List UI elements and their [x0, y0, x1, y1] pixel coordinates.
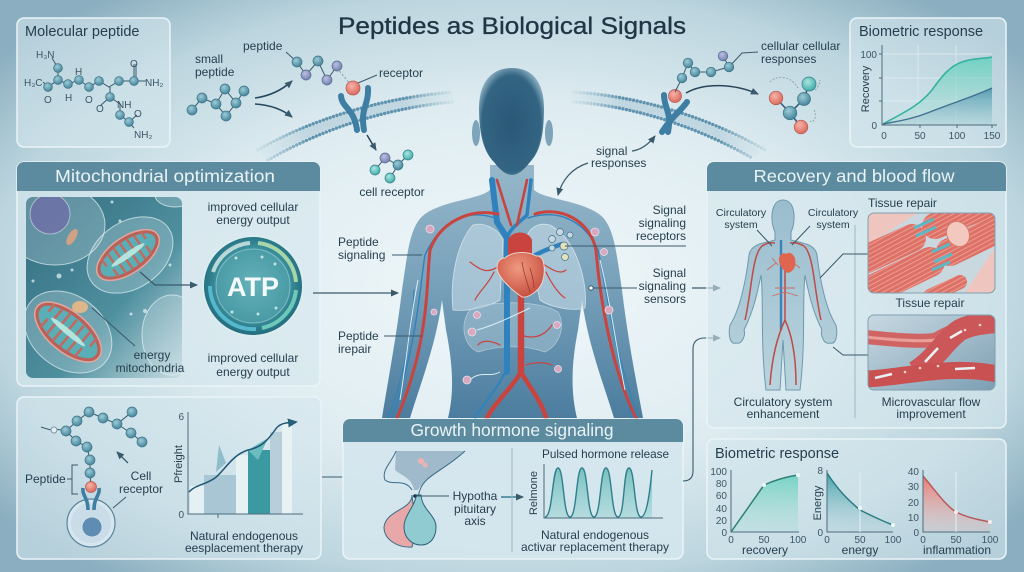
cell membrane: right — [573, 92, 765, 158]
molecule diagram: H₃N — [36, 50, 55, 61]
chart: recovery: 60 — [716, 491, 727, 502]
heading: molecular peptide: Molecular peptide — [25, 24, 139, 40]
arteries: red — [397, 180, 636, 418]
body silhouette — [382, 165, 643, 418]
chart: inflammation: 20 — [908, 498, 919, 509]
nerves — [400, 260, 625, 400]
panel: growth hormone signaling — [343, 419, 683, 559]
line chart: recovery: Recovery — [860, 65, 872, 112]
mitochondria illustration — [26, 197, 182, 378]
peptide chain: right — [675, 51, 758, 92]
mitochondrion: lower — [34, 301, 102, 363]
header bar — [17, 162, 320, 191]
line chart: recovery — [860, 45, 1001, 142]
bar and curve chart: 6 — [178, 412, 184, 423]
circulatory body figure — [729, 200, 837, 390]
chart: energy: 50 — [854, 535, 866, 546]
line chart: recovery: 150 — [984, 131, 1001, 142]
chart: inflammation: 50 — [950, 535, 962, 546]
panel: recovery and blood flow — [707, 162, 1006, 428]
chart: inflammation: 10 — [908, 513, 919, 524]
chart: recovery: 100 — [710, 467, 727, 478]
chart: inflammation: 40 — [908, 467, 919, 478]
chart: inflammation: 0 — [920, 535, 926, 546]
improved cellular text: top: energy output — [216, 213, 290, 227]
peptide chain — [41, 407, 147, 487]
circulatory label: left — [716, 207, 772, 246]
molecule diagram: O — [134, 109, 142, 120]
panel: peptide and cell receptor — [17, 397, 321, 559]
heading: Biometric response — [859, 24, 983, 40]
molecule diagram: O — [85, 95, 93, 106]
panel: biometric response top — [850, 18, 1006, 147]
labels: signal signaling receptors — [565, 203, 686, 246]
circulatory enhancement caption: Circulatory system — [734, 395, 832, 409]
labels: peptide repair: Peptide — [338, 329, 379, 343]
labels: signal signaling sensors: Signal — [653, 266, 686, 280]
chart: energy: 0 — [817, 528, 823, 539]
chart: energy: 0 — [824, 535, 830, 546]
molecule diagram: H — [65, 93, 72, 104]
chart: recovery — [710, 467, 807, 557]
ATP circle: ATP — [227, 272, 279, 302]
heart — [497, 232, 544, 297]
chart: energy: 100 — [885, 535, 902, 546]
cell receptor chain — [370, 150, 413, 183]
labels: signal signaling receptors: signaling — [639, 216, 686, 230]
chart: energy: 8 — [817, 466, 823, 477]
small peptide label: small — [195, 52, 223, 66]
labels: signal signaling receptors: receptors — [636, 229, 686, 243]
peptide label with bracket — [25, 465, 78, 494]
chart: inflammation: 100 — [982, 535, 999, 546]
tissue repair image — [868, 212, 996, 294]
chart: recovery: 50 — [758, 535, 770, 546]
cell receptor label: cell receptor — [359, 185, 425, 199]
molecule diagram: H — [75, 67, 82, 78]
pituitary illustration — [384, 451, 465, 547]
chart: energy: Energy — [812, 485, 824, 520]
circulatory enhancement caption: enhancement — [747, 407, 820, 421]
cellular responses label: responses — [761, 52, 816, 66]
circulatory label: right: system — [816, 219, 850, 231]
receptor: right — [662, 90, 687, 132]
molecule diagram: NH₂ — [134, 130, 152, 141]
labels: peptide repair: irepair — [338, 342, 371, 356]
panel: mitochondrial optimization — [5, 162, 320, 390]
small peptide label: peptide — [195, 65, 235, 79]
chart: energy — [812, 466, 902, 557]
chart: recovery: recovery — [742, 543, 788, 557]
bar and curve chart: 0 — [178, 510, 184, 521]
ears — [472, 120, 553, 146]
line chart: recovery: 100 — [860, 50, 877, 61]
chart: recovery: 80 — [716, 479, 727, 490]
header bar — [343, 419, 683, 442]
cell with receptor — [67, 482, 115, 547]
molecule diagram: O — [44, 95, 52, 106]
lungs — [452, 224, 586, 310]
receptor cluster — [548, 228, 573, 260]
pulsed hormone chart: Relmone — [528, 471, 540, 515]
heading: Mitochondrial optimization — [55, 166, 275, 186]
line chart: recovery: 100 — [949, 131, 966, 142]
labels: peptide signaling — [338, 235, 422, 262]
human body figure — [382, 68, 643, 418]
hypothalamus pituitary label: axis — [464, 514, 486, 528]
molecule diagram: NH₂ — [145, 78, 163, 89]
line chart: recovery: 0 — [871, 121, 877, 132]
circulatory label: right — [792, 207, 859, 245]
head — [479, 68, 544, 175]
title: Peptides as Biological Signals — [338, 13, 686, 40]
circulatory label: left: Circulatory — [716, 207, 766, 219]
chart: inflammation: 0 — [913, 528, 919, 539]
arrow: to cellular response — [686, 86, 758, 94]
connector: bottom left panel to growth panel — [322, 476, 343, 478]
cell receptor label: Cell — [131, 469, 151, 483]
microvascular image — [866, 315, 997, 390]
tissue repair caption: Tissue repair — [896, 296, 964, 310]
circulatory label: right: Circulatory — [808, 207, 858, 219]
heading: Biometric response — [715, 446, 839, 462]
chart: recovery: 0 — [728, 535, 734, 546]
chart: inflammation: 30 — [908, 482, 919, 493]
mitochondria label: energy — [134, 348, 170, 362]
connector: growth panel to recovery panel — [683, 338, 720, 481]
small peptide chain — [187, 84, 249, 121]
arrow: signal to recovery panel — [692, 287, 720, 289]
response molecule cluster — [769, 77, 820, 134]
labels: peptide signaling: Peptide — [338, 235, 379, 249]
cell receptor label — [113, 452, 163, 508]
therapy caption: activar replacement therapy — [521, 540, 669, 554]
divider — [511, 448, 513, 552]
improved cellular text: top: improved cellular — [208, 200, 298, 214]
labels: peptide repair — [338, 329, 422, 356]
ATP circle — [203, 236, 303, 336]
mitochondria label: mitochondria — [116, 361, 185, 375]
labels: signal signaling sensors: signaling — [639, 279, 686, 293]
line chart: recovery: 0 — [881, 131, 887, 142]
improved cellular text: bottom: improved cellular — [208, 351, 298, 365]
header bar — [707, 162, 1006, 191]
line chart: recovery: 50 — [914, 131, 926, 142]
chart: recovery: 20 — [716, 516, 727, 527]
chart: recovery: 100 — [790, 535, 807, 546]
heading: Growth hormone signaling — [410, 420, 614, 440]
molecule diagram: O — [130, 59, 138, 70]
molecule diagram — [24, 50, 163, 141]
peptide label with bracket: Peptide — [25, 472, 66, 486]
microvascular caption: improvement — [896, 407, 966, 421]
signal nodes on body — [426, 225, 613, 384]
chart: recovery: 40 — [716, 504, 727, 515]
improved cellular text: bottom: energy output — [216, 365, 290, 379]
cell membrane: left — [258, 92, 453, 160]
tissue repair label: Tissue repair — [868, 196, 937, 210]
divider — [854, 225, 856, 418]
abdomen organ — [464, 303, 562, 352]
connectors to insets — [820, 254, 868, 355]
peptide label: peptide — [243, 39, 283, 53]
labels: signal responses — [558, 136, 655, 195]
labels: signal responses: responses — [591, 156, 646, 170]
arteries: blue — [388, 180, 638, 418]
labels: signal signaling sensors: sensors — [644, 292, 686, 306]
hypothalamus pituitary label: Hypotha — [453, 489, 497, 503]
arrow: mitochondria to ATP — [140, 272, 197, 285]
circulatory label: left: system — [724, 219, 758, 231]
labels: signal signaling sensors — [589, 266, 686, 306]
arrow: receptor to chain — [367, 135, 376, 150]
bar and curve chart — [173, 412, 303, 521]
chart: inflammation — [908, 467, 999, 557]
labels: signal signaling receptors: Signal — [653, 203, 686, 217]
mitochondrion: upper — [96, 228, 160, 282]
labels: signal responses: signal — [596, 144, 627, 158]
chart caption: Natural endogenous — [190, 529, 298, 543]
pulsed hormone chart — [528, 464, 663, 518]
receptor: left — [341, 81, 368, 130]
molecule diagram: H₃C — [24, 78, 43, 89]
panel: biometric response bottom — [707, 439, 1006, 559]
arrow: axis to pulses — [501, 496, 523, 498]
peptide chain binding receptor — [286, 52, 350, 85]
panel: molecular peptide — [17, 18, 170, 147]
chart: recovery: 0 — [721, 528, 727, 539]
molecule diagram: NH — [117, 100, 131, 111]
molecule diagram: O — [96, 104, 104, 115]
heading: Recovery and blood flow — [754, 166, 955, 186]
mitochondria label — [92, 308, 185, 375]
receptor label: receptor — [379, 66, 423, 80]
arrow: ATP to body — [313, 292, 398, 294]
chart caption: eesplacement therapy — [185, 541, 303, 555]
pulsed hormone label: Pulsed hormone release — [542, 447, 669, 461]
arrows: small peptide to receptor — [255, 81, 292, 117]
chart: inflammation: inflammation — [923, 543, 991, 557]
hypothalamus pituitary label: pituitary — [454, 502, 496, 516]
cell receptor label: receptor — [119, 482, 163, 496]
bar and curve chart: Pfreight — [173, 445, 185, 483]
labels: peptide signaling: signaling — [338, 248, 385, 262]
therapy caption: Natural endogenous — [541, 528, 649, 542]
microvascular caption: Microvascular flow — [882, 395, 980, 409]
chart: energy: energy — [842, 543, 878, 557]
cellular responses label: cellular cellular — [761, 39, 840, 53]
